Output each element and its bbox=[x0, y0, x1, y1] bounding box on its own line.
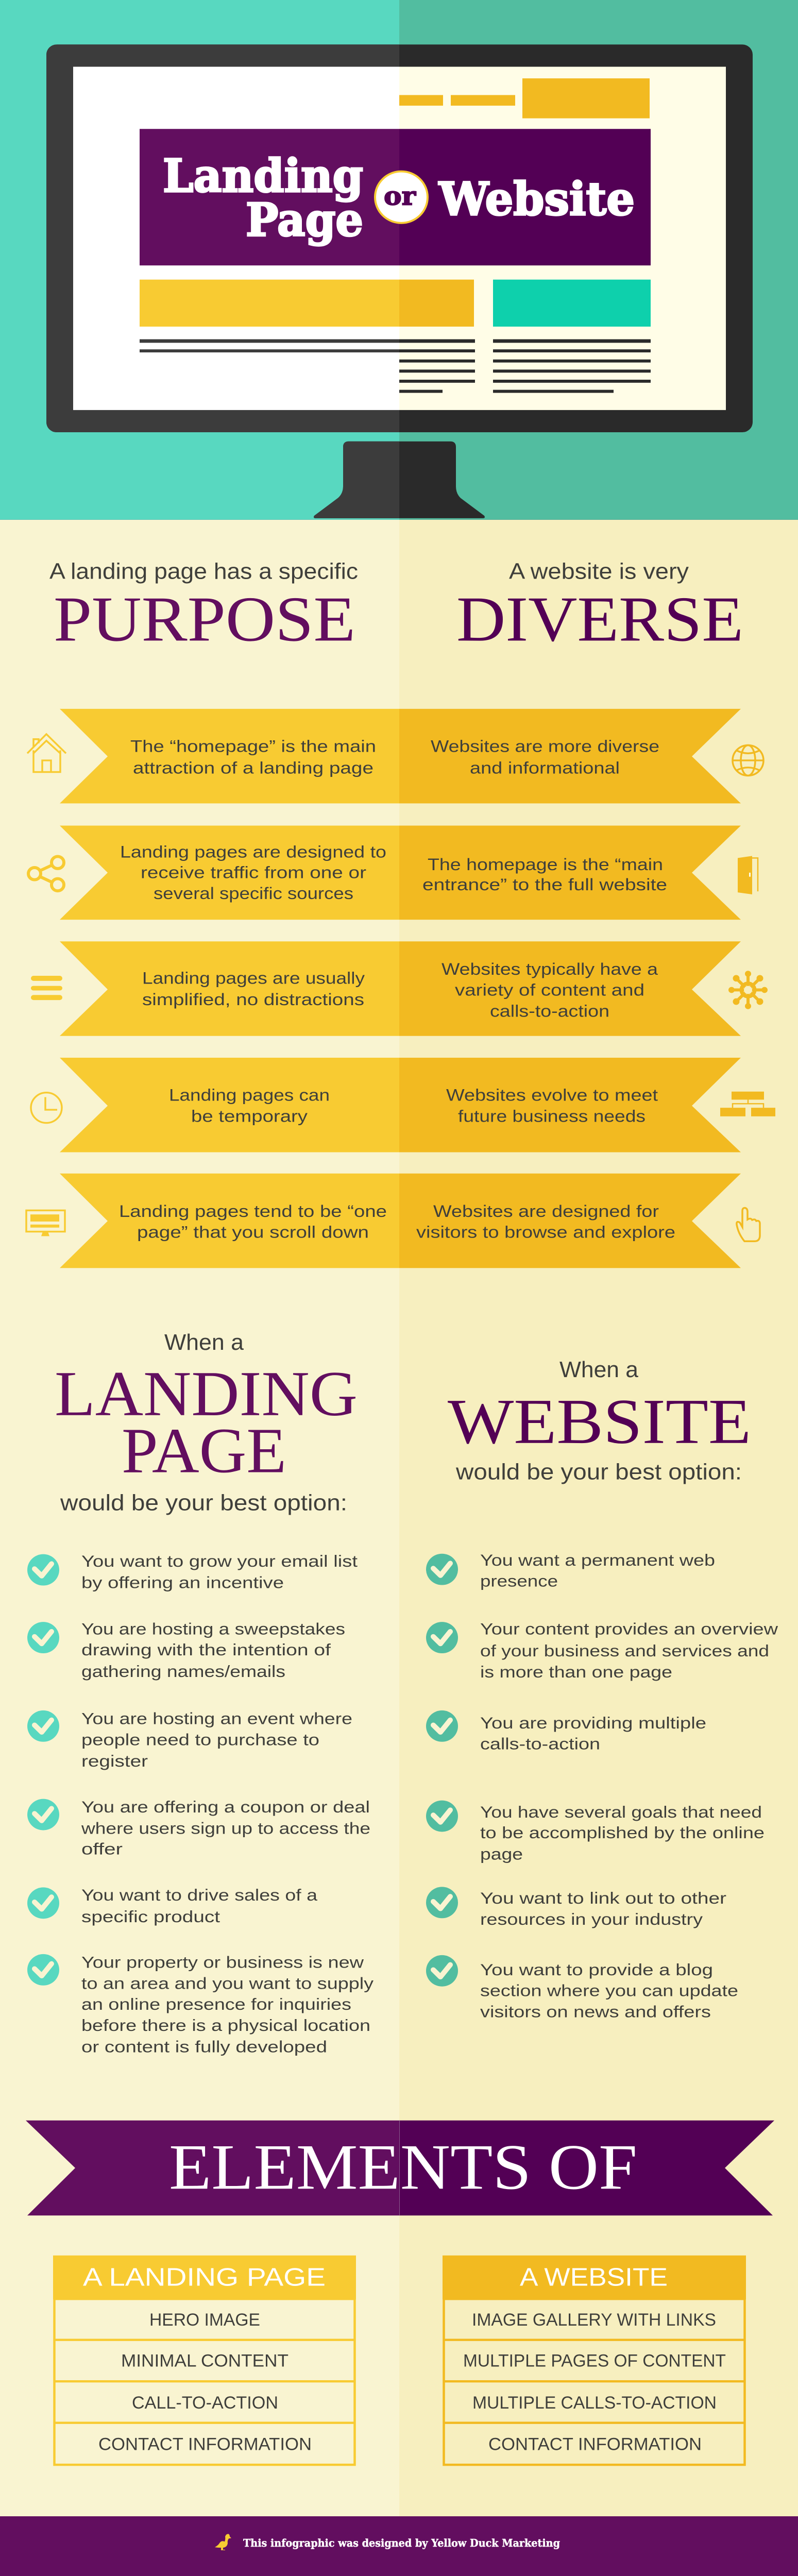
text: homepage bbox=[130, 737, 376, 777]
table rows: CONTACT INFORMATION bbox=[488, 2435, 702, 2454]
checklist: website bbox=[426, 1551, 778, 2021]
content block yellow bbox=[140, 280, 474, 327]
item: sweepstakes: drawing with the intention of bbox=[81, 1640, 331, 1659]
heading: purpose bbox=[49, 560, 358, 655]
text: diverse websites: and informational bbox=[470, 758, 620, 777]
item: link out: resources in your industry bbox=[480, 1910, 703, 1928]
item: overview content bbox=[426, 1620, 778, 1681]
item: link out: You want to link out to other bbox=[480, 1889, 727, 1907]
text: browse and explore: Websites are designed for bbox=[433, 1201, 659, 1221]
icon: hub bbox=[728, 971, 768, 1009]
title text: Landing Page: Landing bbox=[163, 149, 363, 203]
table rows: MULTIPLE PAGES OF CONTENT bbox=[463, 2351, 726, 2371]
item: event: You are hosting an event where bbox=[81, 1709, 352, 1727]
table rows bbox=[98, 2311, 312, 2454]
text: simplified: Landing pages are usually bbox=[142, 969, 365, 988]
item: multiple calls-to-action bbox=[426, 1710, 706, 1753]
title text: Landing Page bbox=[163, 149, 363, 247]
icon: share bbox=[28, 856, 64, 891]
text: traffic sources: Landing pages are designed to bbox=[120, 842, 386, 861]
item: new business: or content is fully developed bbox=[81, 2038, 327, 2056]
item: several goals bbox=[426, 1801, 765, 1863]
text: simplified bbox=[142, 969, 365, 1009]
item: new business bbox=[27, 1953, 373, 2056]
item: link out bbox=[426, 1887, 727, 1928]
text: temporary bbox=[169, 1086, 330, 1126]
item: coupon: where users sign up to access the bbox=[81, 1819, 370, 1837]
heading: when a landing page: would be your best option: bbox=[60, 1491, 347, 1515]
item: email list bbox=[27, 1552, 358, 1591]
banner: elements of bbox=[26, 2121, 774, 2215]
item: event: register bbox=[81, 1752, 148, 1770]
item: new business: before there is a physical location bbox=[81, 2016, 370, 2035]
heading: purpose: PURPOSE bbox=[54, 584, 355, 655]
item: permanent presence: You want a permanent web bbox=[480, 1551, 715, 1569]
item: new business: to an area and you want to supply bbox=[81, 1974, 373, 1993]
panel: hero with desktop monitor bbox=[0, 0, 798, 520]
ribbon row 4 bbox=[31, 1058, 775, 1153]
item: overview content: Your content provides an overview bbox=[480, 1620, 778, 1638]
item: email list: You want to grow your email list bbox=[81, 1552, 358, 1570]
text: variety of content bbox=[442, 959, 658, 1020]
icon: door bbox=[738, 856, 758, 894]
text: temporary: Landing pages can bbox=[169, 1086, 330, 1104]
ribbon row 3 bbox=[31, 941, 768, 1036]
ribbon row 5 bbox=[26, 1174, 760, 1268]
monitor screen bbox=[73, 67, 726, 410]
item: coupon: You are offering a coupon or deal bbox=[81, 1798, 370, 1816]
text: traffic sources: receive traffic from one or bbox=[141, 863, 366, 882]
table header: A LANDING PAGE bbox=[83, 2263, 326, 2292]
item: multiple calls-to-action: You are providing multiple bbox=[480, 1714, 706, 1732]
heading: when a website bbox=[448, 1358, 751, 1484]
text: variety of content: Websites typically have a bbox=[442, 959, 658, 978]
text: main entrance bbox=[422, 855, 667, 894]
text: browse and explore: visitors to browse and explore bbox=[416, 1223, 675, 1241]
heading: when a landing page: When a bbox=[164, 1331, 244, 1355]
item: product sales: specific product bbox=[81, 1907, 220, 1926]
text: traffic sources bbox=[120, 842, 386, 903]
item: several goals: to be accomplished by the online bbox=[480, 1823, 765, 1842]
item: blog section: visitors on news and offers bbox=[480, 2003, 711, 2021]
heading: when a website: would be your best option: bbox=[455, 1460, 742, 1484]
text: browse and explore bbox=[416, 1201, 675, 1241]
table: a website bbox=[443, 2256, 746, 2465]
item: blog section: section where you can update bbox=[480, 1981, 738, 1999]
icon: clock bbox=[31, 1093, 62, 1123]
item: product sales: You want to drive sales of a bbox=[81, 1886, 317, 1904]
item: new business: Your property or business is new bbox=[81, 1953, 364, 1971]
text: one page: page” that you scroll down bbox=[137, 1223, 369, 1241]
ribbon row 1 bbox=[27, 709, 763, 803]
item: coupon bbox=[27, 1798, 370, 1858]
text: one page: Landing pages tend to be “one bbox=[119, 1201, 387, 1221]
content block teal bbox=[493, 280, 651, 327]
item: email list: by offering an incentive bbox=[81, 1573, 284, 1591]
icon: small monitor bbox=[26, 1210, 65, 1236]
heading: when a landing page: PAGE bbox=[122, 1416, 286, 1486]
footer credit: This infographic was designed by Yellow Duck Marketing bbox=[243, 2536, 560, 2549]
banner title: ELEMENTS OF bbox=[169, 2131, 637, 2203]
heading: when a website: When a bbox=[559, 1358, 639, 1382]
icon: duck bbox=[215, 2534, 231, 2550]
placeholder text lines bbox=[140, 339, 651, 393]
or badge: or bbox=[384, 181, 416, 211]
text: evolve: future business needs bbox=[458, 1107, 646, 1126]
table rows bbox=[463, 2311, 726, 2454]
item: several goals: page bbox=[480, 1845, 523, 1863]
table rows: IMAGE GALLERY WITH LINKS bbox=[472, 2311, 716, 2330]
item: sweepstakes: gathering names/emails bbox=[81, 1662, 285, 1681]
icon: house bbox=[27, 734, 66, 772]
title text: Website: Website bbox=[438, 173, 635, 226]
item: new business: an online presence for inquiries bbox=[81, 1995, 351, 2013]
text: main entrance: The homepage is the “main bbox=[428, 855, 663, 874]
page background: two-tone columns bbox=[0, 520, 798, 2516]
table rows: CALL-TO-ACTION bbox=[132, 2393, 278, 2413]
icon: pointing hand bbox=[737, 1208, 760, 1241]
item: overview content: of your business and services and bbox=[480, 1641, 769, 1660]
title band bbox=[140, 129, 651, 265]
item: permanent presence: presence bbox=[480, 1572, 558, 1590]
item: overview content: is more than one page bbox=[480, 1663, 672, 1681]
text: simplified: simplified, no distractions bbox=[142, 990, 364, 1009]
table rows: HERO IMAGE bbox=[149, 2311, 260, 2330]
icon: globe bbox=[733, 745, 763, 775]
icon: sitemap bbox=[720, 1092, 775, 1116]
website navigation blocks bbox=[399, 78, 650, 118]
table rows: MULTIPLE CALLS-TO-ACTION bbox=[472, 2393, 717, 2413]
or badge bbox=[375, 172, 428, 223]
heading: when a website: WEBSITE bbox=[448, 1386, 751, 1458]
heading: diverse: A website is very bbox=[509, 560, 689, 584]
item: product sales bbox=[27, 1886, 317, 1926]
text: homepage: attraction of a landing page bbox=[133, 758, 373, 777]
text: traffic sources: several specific sources bbox=[154, 884, 353, 903]
icon: menu bars bbox=[31, 976, 62, 1000]
item: permanent presence bbox=[426, 1551, 715, 1590]
heading: when a landing page: LANDING bbox=[55, 1359, 358, 1430]
heading: diverse: DIVERSE bbox=[456, 584, 743, 655]
item: sweepstakes: You are hosting a sweepstakes bbox=[81, 1620, 345, 1638]
monitor frame bbox=[46, 44, 753, 432]
text: one page bbox=[119, 1201, 387, 1241]
text: diverse websites bbox=[431, 737, 659, 777]
item: event: people need to purchase to bbox=[81, 1731, 319, 1749]
ribbon row 2 bbox=[28, 826, 758, 920]
footer bbox=[0, 2516, 798, 2576]
text: evolve bbox=[446, 1086, 658, 1126]
item: sweepstakes bbox=[27, 1620, 345, 1681]
text: variety of content: calls-to-action bbox=[490, 1002, 609, 1020]
item: several goals: You have several goals that need bbox=[480, 1803, 762, 1821]
title text: Landing Page: Page bbox=[246, 193, 363, 247]
item: blog section bbox=[426, 1955, 738, 2021]
checklist: landing page bbox=[27, 1552, 373, 2056]
text: evolve: Websites evolve to meet bbox=[446, 1086, 658, 1104]
item: blog section: You want to provide a blog bbox=[480, 1960, 713, 1979]
text: diverse websites: Websites are more diverse bbox=[431, 737, 659, 755]
monitor stand bbox=[314, 442, 485, 518]
item: event bbox=[27, 1709, 352, 1770]
item: multiple calls-to-action: calls-to-action bbox=[480, 1735, 600, 1753]
heading: when a landing page bbox=[55, 1331, 358, 1515]
table rows: MINIMAL CONTENT bbox=[121, 2351, 288, 2371]
text: temporary: be temporary bbox=[191, 1107, 308, 1126]
text: variety of content: variety of content and bbox=[455, 980, 644, 999]
heading: purpose: A landing page has a specific bbox=[49, 560, 358, 584]
table header: A WEBSITE bbox=[520, 2263, 668, 2292]
text: homepage: The “homepage” is the main bbox=[130, 737, 376, 755]
table: a landing page bbox=[53, 2256, 356, 2465]
text: main entrance: entrance” to the full website bbox=[422, 875, 667, 894]
item: coupon: offer bbox=[81, 1840, 123, 1858]
table rows: CONTACT INFORMATION bbox=[98, 2435, 312, 2454]
